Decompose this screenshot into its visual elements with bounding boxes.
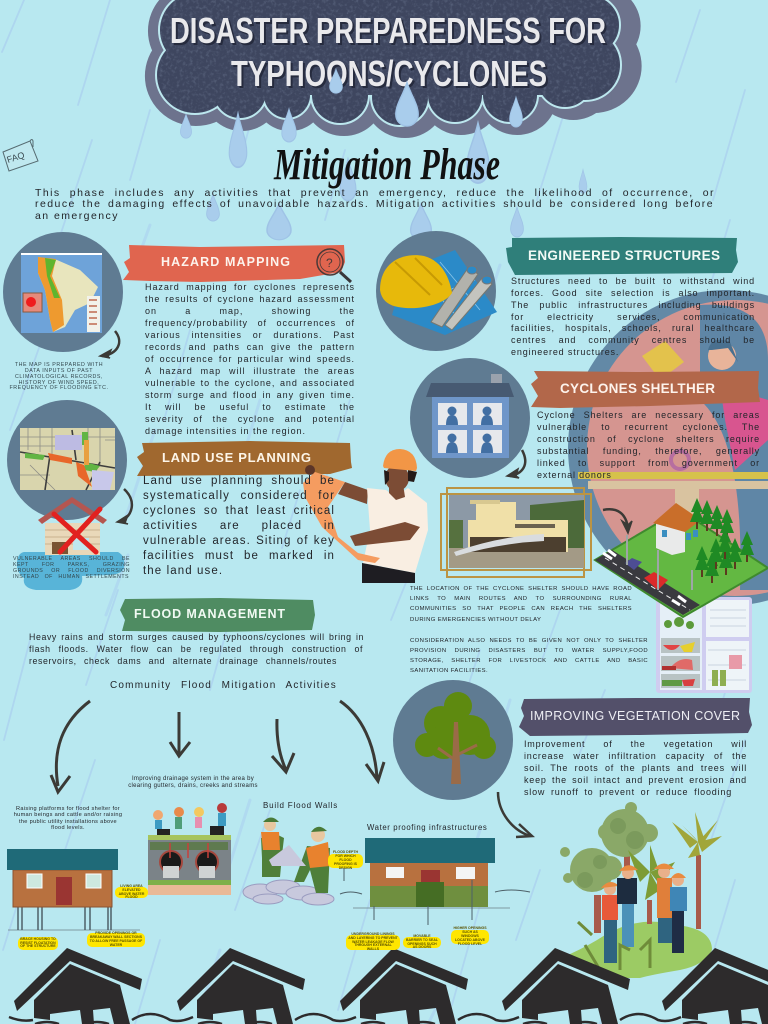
title text: TYPHOONS/CYCLONES xyxy=(233,55,549,96)
text: improving vegetation: keep the soil intact and prevent erosion and xyxy=(524,775,747,785)
illustration: engineer with scroll xyxy=(303,449,428,583)
text: hazard mapping: records and paths can give the pattern xyxy=(145,342,355,352)
banner: flood management: FLOOD MANAGEMENT xyxy=(134,607,285,621)
text: land use planning xyxy=(143,475,335,577)
intro text: reduce the damaging effects of unavoidable hazards. Mitigation activities should be considered long before xyxy=(35,198,714,210)
text: cyclones shelter xyxy=(537,410,760,480)
callout: flood depth xyxy=(328,854,363,868)
icon: FAQ note: FAQ xyxy=(6,150,26,165)
intro text xyxy=(35,187,715,222)
caption: hazard map: CLIMATOLOGICAL RECORDS, xyxy=(15,374,103,380)
text: land use planning: facilities must be marked in xyxy=(143,550,335,562)
heading: community flood mitigation: Community Flood Mitigation Activities xyxy=(110,680,337,691)
callout: openings: PROVIDE OPENINGS OR BREAKAWAY WALL SECTIONS TO ALLOW FREE PASSAGE OF WATER xyxy=(90,931,142,947)
text: land use planning: cyclones so that least critical xyxy=(143,505,335,517)
text: hazard mapping: storm surge and flood in any given time. xyxy=(145,390,355,400)
photo: cyclone shelter building xyxy=(441,488,591,577)
illustration: soldiers with sandbags xyxy=(243,818,334,905)
banner: land use planning: LAND USE PLANNING xyxy=(162,450,311,465)
text: hazard mapping: frequency/probability of occurrences of xyxy=(145,318,355,328)
callout: higher openings: HIGHER OPENINGS SUCH AS WINDOWS LOCATED ABOVE FLOOD LEVEL xyxy=(453,926,487,946)
arrow: to water proofing xyxy=(340,701,384,781)
arrow head xyxy=(51,775,70,792)
illustration: refrigerator xyxy=(656,597,752,693)
person 2 xyxy=(617,865,638,947)
icon: shelter building circle xyxy=(410,358,530,478)
text: flood management: Heavy rains and storm surges caused by typhoons/cyclones will bring in xyxy=(29,632,364,642)
title cloud xyxy=(157,0,629,126)
text: hazard mapping: Hazard mapping for cyclones represents xyxy=(145,282,355,292)
person 4 xyxy=(670,873,687,953)
person 3 xyxy=(654,864,674,943)
caption: drainage: Improving drainage system in the area by xyxy=(132,776,254,782)
banner: improving vegetation cover: IMPROVING VEGETATION COVER xyxy=(530,709,740,723)
illustration: shelter background circle xyxy=(568,290,768,606)
banner: hazard mapping: HAZARD MAPPING xyxy=(161,255,290,269)
caption: vulnerable areas: VULNERABLE AREAS SHOULD BE xyxy=(13,556,130,562)
text: shelter provisions: STORAGE, SHELTER FOR LIVESTOCK AND CATTLE AND BASIC xyxy=(410,658,648,664)
banner: flood management xyxy=(120,598,315,632)
text: hazard mapping: It will be useful to estimate the xyxy=(145,402,355,412)
text: shelter provisions: PROVISION DURING DISASTERS BUT TO WATER SUPPLY,FOOD xyxy=(410,648,648,654)
banner: cyclones shelther xyxy=(531,371,760,408)
intro text: This phase includes any activities that prevent an emergency, reduce the likelihood of occurrence, or xyxy=(35,187,715,199)
callout: higher openings xyxy=(451,930,489,944)
banner: improving vegetation cover xyxy=(519,698,752,736)
text: engineered structures: for electricity services, communication xyxy=(511,312,755,322)
text: cyclones shelter: Cyclone Shelters are necessary for areas xyxy=(537,410,760,420)
title text xyxy=(170,10,608,96)
caption: hazard map: FREQUENCY OF FLOODING ETC. xyxy=(10,385,108,391)
icon: magnifier xyxy=(317,249,351,282)
caption: hazard map: HISTORY OF WIND SPEED, xyxy=(19,380,99,386)
illustration: people planting trees xyxy=(560,802,722,978)
text: engineered structures: The public infrastructures including buildings xyxy=(511,300,755,310)
title text: DISASTER PREPAREDNESS FOR xyxy=(170,10,606,51)
illustration: raised house on stilts xyxy=(7,849,140,930)
arrow head xyxy=(507,469,519,478)
text: hazard mapping: A hazard map will illustrate the areas xyxy=(145,366,355,376)
person 1 xyxy=(601,882,619,963)
text: engineered structures: centres and community centres should be xyxy=(511,335,755,345)
text: land use planning: activities are placed in xyxy=(143,520,335,532)
text: shelter location: DURING EMERGENCIES WITHOUT DELAY xyxy=(410,617,541,623)
caption: hazard map: DATA INPUTS OF PAST xyxy=(25,368,93,374)
text: cyclones shelter: construction of cyclone shelters require xyxy=(537,434,760,444)
caption: drainage xyxy=(128,776,258,789)
text: flood management xyxy=(29,632,364,666)
heading: Mitigation Phase: Mitigation Phase xyxy=(273,140,500,189)
caption: drainage: clearing gutters, drains, creeks and streams xyxy=(128,783,258,789)
arrow: land map to house xyxy=(120,489,132,522)
text: hazard mapping: severity of the cyclone and potential xyxy=(145,414,355,424)
text: cyclones shelter: linked to support from government or xyxy=(537,458,760,468)
text: shelter provisions xyxy=(410,638,648,674)
text: cyclones shelter: external donors xyxy=(537,470,612,480)
icon: helmet and blueprints circle xyxy=(376,231,497,351)
banner: engineered structures: ENGINEERED STRUCTURES xyxy=(528,248,720,263)
icon: hazard map circle xyxy=(3,232,123,352)
caption: vulnerable areas: KEPT FOR PARKS, GRAZING xyxy=(13,562,130,568)
callout: movable barrier: MOVABLE BARRIER TO SEAL OPENINGS SUCH AS DOORS xyxy=(406,934,438,949)
text: hazard mapping xyxy=(145,282,355,436)
text: land use planning: systematically considered for xyxy=(143,490,335,502)
caption: raising platforms: flood levels. xyxy=(51,825,85,831)
intro text: an emergency xyxy=(35,210,119,222)
text: improving vegetation: Improvement of the vegetation will xyxy=(524,739,747,749)
text: engineered structures: forces. Good site selection is also important. xyxy=(511,288,755,298)
text: land use planning: the land use. xyxy=(143,565,223,577)
icon: land use map circle xyxy=(7,400,127,520)
caption: raising platforms: Raising platforms for flood shelter for xyxy=(16,806,120,812)
callout: living area xyxy=(115,887,148,898)
title text: DISASTER PREPAREDNESS FOR xyxy=(172,12,608,53)
title text: TYPHOONS/CYCLONES xyxy=(231,53,547,94)
text: engineered structures: facilities, hospitals, schools, rural healthcare xyxy=(511,323,755,333)
callout: flood depth: FLOOD DEPTH FOR WHICH FLOOD PROOFING IS DESIGN xyxy=(333,850,358,870)
text: improving vegetation xyxy=(524,739,747,797)
banner: cyclones shelther: CYCLONES SHELTHER xyxy=(560,381,715,396)
caption: vulnerable areas: INSTEAD OF HUMAN SETTLEMENTS xyxy=(13,574,129,580)
illustration: kids and drain xyxy=(148,803,231,895)
text: shelter location: LINKS TO MAIN ROUTES AND TO SURROUNDING RURAL xyxy=(410,596,632,602)
text: engineered structures: engineered structures. xyxy=(511,347,619,357)
text: hazard mapping: on a map, showing the xyxy=(145,306,355,316)
arrow: vegetation to people xyxy=(498,792,532,837)
arrow: photo to town xyxy=(603,509,628,528)
caption: vulnerable areas xyxy=(13,556,130,580)
text: cyclones shelter: vulnerable to recurrent cyclones. The xyxy=(537,422,760,432)
caption: flood walls: Build Flood Walls xyxy=(263,801,338,810)
text: hazard mapping: damage intensities in the region. xyxy=(145,426,306,436)
caption: hazard map: THE MAP IS PREPARED WITH xyxy=(15,362,103,368)
banner: engineered structures xyxy=(506,237,738,275)
caption: raising platforms: human beings and cattle and/or raising xyxy=(14,812,122,818)
banner: land use planning xyxy=(137,441,352,476)
text: improving vegetation: soil. The roots of the plants and trees will xyxy=(524,763,747,773)
text: hazard mapping: of occurrence for particular wind speeds. xyxy=(145,354,355,364)
illustration: isometric town xyxy=(595,498,768,617)
text: improving vegetation: increase water infiltration capacity of the xyxy=(524,751,747,761)
text: hazard mapping: the results of cyclone hazard assessment xyxy=(145,294,355,304)
arrow: left curved to raised house xyxy=(56,701,90,786)
text: improving vegetation: slow runoff to prevent or reduce flooding xyxy=(524,787,732,797)
icon: tree circle xyxy=(393,680,513,800)
caption: hazard map xyxy=(10,362,108,391)
text: shelter location: COMMUNITIES SO THAT PEOPLE CAN REACH THE SHELTERS xyxy=(410,606,632,612)
text: flood management: flash floods. Water flow can be regulated through construction of xyxy=(29,644,363,654)
illustration: water-proofed house xyxy=(340,838,530,925)
text: land use planning: vulnerable areas. Siting of key xyxy=(143,535,335,547)
rain drops xyxy=(180,69,587,240)
text: flood management: reservoirs, check dams and alternate drainage channels/routes xyxy=(29,656,337,666)
callout: underground lining: UNDERGROUND LININGS AND LAYERING TO PREVENT WATER LEAKAGE FLOW THROUGH EXTERNAL WALLS xyxy=(348,932,398,951)
arrow: map to caption xyxy=(102,331,119,356)
caption: water proofing: Water proofing infrastructures xyxy=(367,823,487,832)
arrow head xyxy=(622,521,632,533)
caption: raising platforms: the public utility installations above xyxy=(19,819,117,825)
icon: magnifier: ? xyxy=(326,256,333,270)
icon: FAQ note xyxy=(3,140,38,171)
text: hazard mapping: various intensities or durations. Past xyxy=(145,330,355,340)
arrow: shelter to photo xyxy=(510,450,525,476)
text: engineered structures: Structures need to be built to withstand wind xyxy=(511,276,755,286)
arrow: to flood walls xyxy=(272,719,294,772)
text: shelter location xyxy=(410,586,632,623)
caption: vulnerable areas: GROUNDS OR FLOOD DIVERSION xyxy=(13,568,130,574)
text: engineered structures xyxy=(511,276,755,357)
banner: hazard mapping xyxy=(123,245,351,282)
callout: living area: LIVING AREA ELEVATED ABOVE WATER FLOOD xyxy=(119,884,144,899)
callout: movable barrier xyxy=(403,937,441,948)
text: shelter provisions: CONSIDERATION ALSO NEEDS TO BE GIVEN NOT ONLY TO SHELTER xyxy=(410,638,648,644)
flooded houses row xyxy=(9,948,768,1024)
text: land use planning: Land use planning should be xyxy=(143,475,335,487)
arrow head xyxy=(117,515,128,524)
callout: bracing: BRACE HOUSING TO RESIST FLOATATION OF THE STRUCTURE xyxy=(20,937,56,948)
arrow head xyxy=(100,350,111,358)
caption: raising platforms xyxy=(14,806,122,831)
arrow: to drainage xyxy=(170,712,190,756)
icon: crossed-out house in water xyxy=(17,497,124,590)
text: shelter provisions: SANITATION FACILITIES. xyxy=(410,668,488,674)
text: shelter location: THE LOCATION OF THE CYCLONE SHELTER SHOULD HAVE ROAD xyxy=(410,586,632,592)
text: hazard mapping: vulnerable to the cyclone, and associated xyxy=(145,378,355,388)
text: cyclones shelter: substantial funding, therefore, generally xyxy=(537,446,760,456)
